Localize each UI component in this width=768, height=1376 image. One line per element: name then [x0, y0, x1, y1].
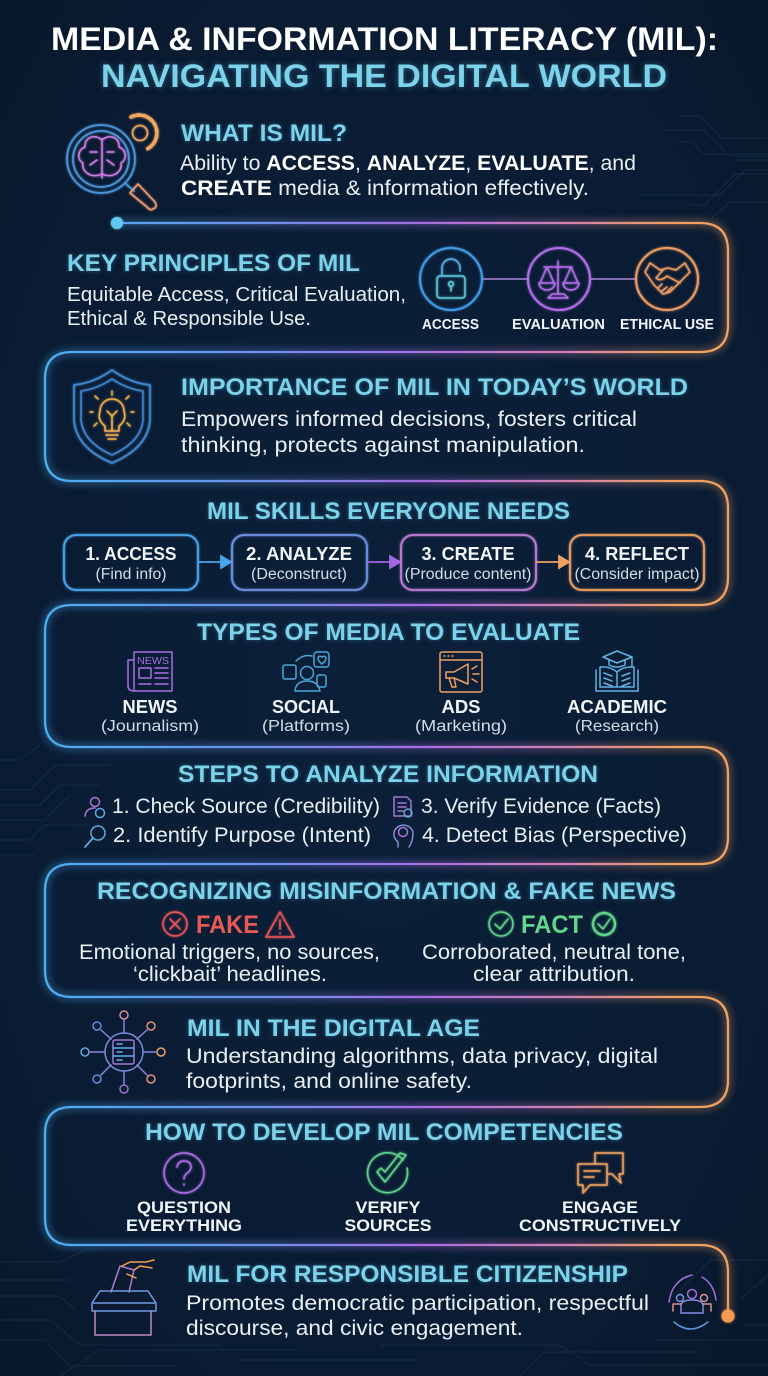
arrow: [198, 556, 231, 568]
label: news: NEWS: [122, 697, 178, 717]
panel: competencies: [126, 1119, 682, 1235]
skill: create: 3. CREATE: [422, 544, 514, 564]
label: social: [262, 697, 350, 735]
fake text: ‘clickbait’ headlines.: [133, 963, 327, 986]
skill: reflect: [570, 535, 704, 590]
label: ethical use: ETHICAL USE: [620, 317, 714, 333]
panel: steps: [85, 761, 687, 847]
icon: newspaper: [128, 652, 172, 691]
step 2: 2. Identify Purpose (Intent): [113, 824, 371, 847]
icon: magnifier with brain and gear: [67, 115, 157, 210]
fact text: [422, 941, 686, 986]
icon: x circle: [163, 912, 187, 936]
text block: [186, 1292, 649, 1340]
panel: what is MIL: [67, 115, 636, 210]
heading: WHAT IS MIL?: [181, 120, 347, 147]
skill: reflect: 4. REFLECT: [585, 544, 689, 564]
panel: skills: [64, 498, 704, 590]
heading: HOW TO DEVELOP MIL COMPETENCIES: [145, 1119, 623, 1146]
heading: STEPS TO ANALYZE INFORMATION: [178, 761, 598, 788]
heading: MIL SKILLS EVERYONE NEEDS: [207, 498, 570, 525]
icon: evaluation scales: [528, 248, 590, 310]
label: news: (Journalism): [101, 718, 199, 735]
heading: IMPORTANCE OF MIL IN TODAY’S WORLD: [181, 374, 688, 401]
icon: warning: [266, 912, 294, 937]
text block: [181, 408, 637, 457]
skill: create: (Produce content): [404, 566, 532, 583]
icon: newspaper: NEWS: [137, 656, 169, 667]
fact text: clear attribution.: [473, 963, 635, 986]
skill: access: [64, 535, 198, 590]
skill: access: 1. ACCESS: [86, 544, 176, 564]
arrow: [367, 556, 400, 568]
arrow: [536, 556, 569, 568]
fact text: Corroborated, neutral tone,: [422, 941, 686, 964]
skill: create: [401, 535, 536, 590]
icon: ads: [440, 652, 482, 692]
icon: social: [283, 652, 329, 691]
panel: key principles: [67, 248, 714, 333]
icon: community cycle: [669, 1275, 716, 1329]
label: social: SOCIAL: [272, 697, 340, 717]
text block: [180, 152, 636, 200]
skill: access: (Find info): [96, 566, 166, 583]
label: ads: (Marketing): [415, 718, 507, 735]
icon: ethical use handshake: [636, 248, 698, 310]
heading: MIL FOR RESPONSIBLE CITIZENSHIP: [187, 1261, 628, 1288]
item: engage constructively: [519, 1153, 682, 1235]
label: evaluation: EVALUATION: [512, 317, 605, 333]
item: verify sources: [344, 1153, 432, 1235]
fact label: FACT: [521, 911, 583, 939]
label: academic: (Research): [575, 718, 659, 735]
text block: Promotes democratic participation, respectful: [186, 1292, 649, 1315]
text block: [67, 284, 406, 330]
item: question everything: [126, 1153, 242, 1235]
icon: access open lock: [420, 248, 482, 310]
fake text: [79, 941, 380, 986]
text block: [186, 1045, 658, 1093]
text block: footprints, and online safety.: [186, 1070, 472, 1093]
step 1: 1. Check Source (Credibility): [112, 795, 380, 818]
skill: analyze: 2. ANALYZE: [246, 544, 352, 564]
icon: check circle: [489, 912, 513, 936]
label: news: [101, 697, 199, 735]
heading: TYPES OF MEDIA TO EVALUATE: [197, 619, 580, 646]
fact column: [422, 911, 686, 986]
label: [519, 1198, 682, 1235]
label: CONSTRUCTIVELY: [519, 1216, 682, 1235]
title: NAVIGATING THE DIGITAL WORLD: [101, 58, 667, 94]
panel: misinformation: [79, 878, 686, 986]
icon: check: [368, 1153, 408, 1193]
serpentine connector line: [45, 217, 734, 1322]
skill: analyze: [232, 535, 367, 590]
heading: MIL IN THE DIGITAL AGE: [187, 1015, 480, 1042]
text block: CREATE media & information effectively.: [181, 177, 589, 200]
text block: Ethical & Responsible Use.: [67, 308, 311, 330]
icon: shield with light bulb: [74, 370, 150, 463]
label: [126, 1198, 242, 1235]
label: EVERYTHING: [126, 1216, 242, 1235]
label: SOURCES: [344, 1216, 432, 1235]
skill: analyze: (Deconstruct): [251, 566, 347, 583]
fake text: Emotional triggers, no sources,: [79, 941, 380, 964]
label: ads: ADS: [442, 697, 480, 717]
text block: Equitable Access, Critical Evaluation,: [67, 284, 406, 306]
fake column: [79, 911, 380, 986]
principle connectors: [482, 278, 636, 280]
icon: academic book: [596, 651, 638, 691]
title: [51, 21, 718, 94]
icon: check badge: [593, 913, 615, 935]
label: ads: [415, 697, 507, 735]
heading: RECOGNIZING MISINFORMATION & FAKE NEWS: [97, 878, 676, 905]
panel: importance: [74, 370, 688, 463]
label: ENGAGE: [562, 1198, 638, 1217]
label: access: ACCESS: [422, 317, 479, 333]
heading: KEY PRINCIPLES OF MIL: [67, 250, 360, 277]
label: VERIFY: [356, 1198, 421, 1217]
label: academic: ACADEMIC: [567, 697, 667, 717]
text block: discourse, and civic engagement.: [186, 1317, 523, 1340]
icon: chat bubbles: [578, 1153, 623, 1193]
icon: ballot box: [92, 1260, 156, 1335]
skill: reflect: (Consider impact): [574, 566, 700, 583]
step 4: 4. Detect Bias (Perspective): [422, 824, 687, 847]
icon: data network: [81, 1011, 165, 1093]
panel: types of media: [101, 619, 667, 735]
label: social: (Platforms): [262, 718, 350, 735]
title: MEDIA & INFORMATION LITERACY (MIL):: [51, 21, 718, 57]
fake label: FAKE: [196, 911, 259, 939]
icon: question mark: [164, 1153, 204, 1193]
panel: citizenship: [92, 1260, 716, 1340]
text block: Empowers informed decisions, fosters critical: [181, 408, 637, 431]
step 3: 3. Verify Evidence (Facts): [421, 795, 661, 818]
text block: Understanding algorithms, data privacy, digital: [186, 1045, 658, 1068]
text block: thinking, protects against manipulation.: [181, 434, 585, 457]
panel: digital age: [81, 1011, 658, 1093]
label: QUESTION: [137, 1198, 231, 1217]
label: [344, 1198, 432, 1235]
label: academic: [567, 697, 667, 735]
text block: Ability to ACCESS, ANALYZE, EVALUATE, and: [180, 152, 636, 175]
